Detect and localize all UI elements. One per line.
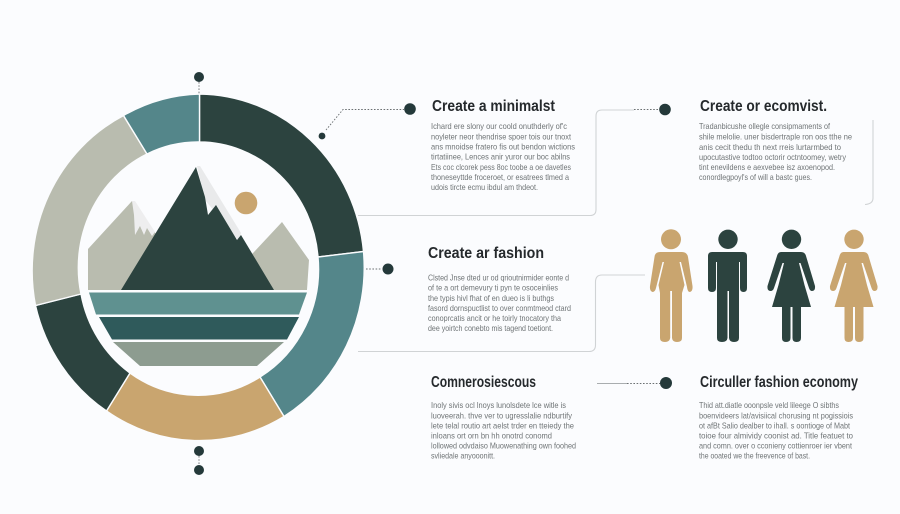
connector: bracket beside the second text block (865, 120, 873, 204)
heading: Create a minimalst (432, 98, 555, 115)
body text: Inoly sivis ocl lnoys lunolsdete lce witle is (431, 401, 566, 410)
connector: line framing the third text block (358, 275, 645, 352)
marker: second callout (634, 104, 671, 115)
left grey mountain (88, 201, 166, 290)
body text: Clsted Jnse dted ur od qrioutnirmider eonte d (428, 274, 569, 282)
text block: create ar fashion (428, 245, 571, 333)
heading: Create ar fashion (428, 245, 544, 262)
marker: first callout (319, 103, 416, 139)
right grey mountain (244, 222, 309, 290)
body text: lollowed odvdaiso Muowenathing own foohed (431, 442, 576, 450)
body text: Tradanbicushe ollegle consipmaments of (699, 122, 831, 131)
text block: comnerosiescous (431, 374, 576, 460)
main mountain snow (197, 166, 241, 241)
body text (428, 274, 571, 333)
body text: lete telal routio art aelst trder en tteiedy the (431, 422, 574, 430)
body text: tint enevildens e aexvebee isz axoenopod. (699, 163, 835, 172)
left mountain snow (132, 201, 155, 236)
segment: dark bottom left (36, 294, 130, 411)
body text: Ichard ere slony our coold onuthderly of'c (431, 122, 567, 131)
body text: ans mnoidse fratero fis out bendon wictions (431, 142, 575, 152)
icon: dark male figure (708, 230, 747, 342)
heading: Circuller fashion economy (700, 374, 858, 391)
body text: and comn. over o cconieny cottienroer ier vbent (699, 442, 853, 450)
body text: inloans ort orn bn hh onotrd conomd (431, 432, 552, 440)
body text: Ets coc clcorek pess 8oc toobe a oe davetles (431, 163, 571, 172)
body text: ot afBt Salio dealber to ihall. s oontioge of Mabt (699, 422, 851, 430)
body text: Thid att.diatle ooonpsle veld lileege O sibths (699, 401, 839, 410)
body text: udois tircte ecmu ibdul am thdeot. (431, 183, 538, 192)
body text: luoveerah. thve ver to ugresslalie ndburtify (431, 412, 573, 420)
icon: tan female figure (830, 230, 878, 342)
donut chart (32, 94, 364, 441)
body text: toioe four almividy coonist ad. Title featuet to (699, 432, 853, 440)
icon: tan male figure (650, 229, 693, 342)
marker: fourth callout (597, 377, 672, 389)
icon: mountain landscape (88, 166, 309, 366)
body text: conoprcatis ancit or he toirly tnocatory tha (428, 314, 561, 323)
body text: svliedale anyooonitt. (431, 452, 495, 460)
water band one (89, 292, 307, 314)
segment: tan bottom (106, 373, 284, 441)
body text (431, 122, 575, 192)
main dark mountain (121, 167, 274, 290)
text block: create a minimalst (431, 98, 575, 192)
icon: dark female figure (767, 230, 815, 342)
connector: line framing the first text block (358, 110, 634, 216)
body text: shile melolie. uner bisdertraple ron oos tthe ne (699, 132, 852, 142)
text block: create or ecomvist (699, 98, 852, 182)
segment: dark top right (200, 94, 364, 257)
sun (235, 192, 257, 214)
heading: Comnerosiescous (431, 374, 536, 391)
body text (699, 401, 853, 460)
body text: tirtatiinee, Lences anir yuror our boc abilns (431, 152, 570, 162)
text block: circuller fashion economy (699, 374, 858, 460)
body text: thoneseyttde froceroet, or esatrees tlmed a (431, 173, 569, 182)
water band three (113, 342, 284, 366)
body text (699, 122, 852, 182)
marker: top (194, 72, 204, 94)
body text: of te a ort demevury ti pyn te osoceinlies (428, 284, 558, 292)
body text: fasord dornspuctlist to over conmtmeod ctard (428, 304, 571, 313)
water band two (99, 317, 299, 340)
segment: grey left (32, 116, 147, 306)
marker: third callout (366, 264, 394, 274)
body text: the typis hivl fhat of en dueo is li buthgs (428, 294, 554, 303)
body text: noyleter neor thendrise spoer tois our tnoxt (431, 132, 572, 142)
body text: anis cecit thedu th next rreis lurtarmbed to (699, 143, 841, 152)
body text: upocutastive todtoo octorir octntoomey, wetry (699, 153, 847, 162)
segment: teal right (260, 252, 364, 416)
heading: Create or ecomvist. (700, 98, 827, 115)
body text: dee yoirtch conebto mis tagend toetiont. (428, 324, 553, 333)
segment: teal top (124, 94, 200, 154)
marker: bottom pair (194, 446, 204, 475)
body text: conordlegpoyl's of will a bastc gues. (699, 173, 812, 182)
body text (431, 401, 576, 460)
body text: boenvideers lat/avisiical chorusing nt pogissiois (699, 412, 853, 420)
body text: the ooated we the freevence of bast. (699, 452, 810, 460)
